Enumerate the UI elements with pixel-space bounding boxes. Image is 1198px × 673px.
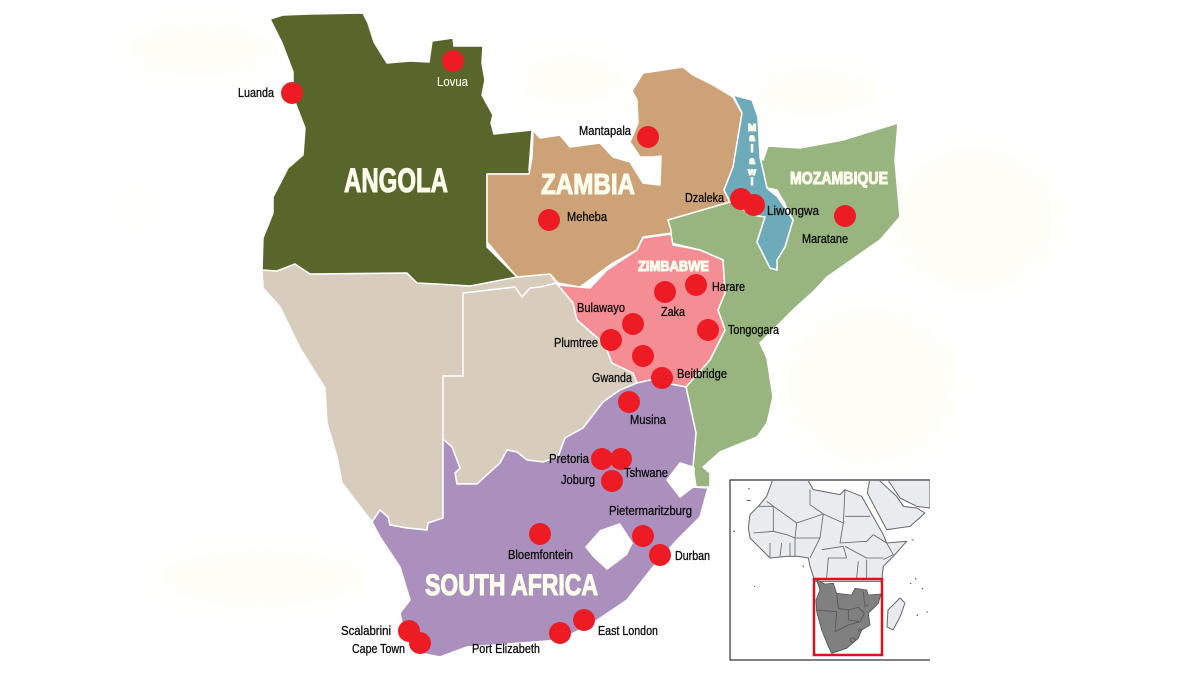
country names: SOUTH AFRICA [425, 569, 598, 602]
label: Malawi: w [747, 167, 756, 178]
inset highlight box [814, 579, 882, 655]
country: Malawi [724, 95, 793, 270]
label: Malawi [747, 123, 756, 188]
site labels [238, 74, 848, 656]
site markers [281, 50, 856, 654]
site labels: Tongogara [728, 322, 780, 337]
site labels: Port Elizabeth [472, 641, 540, 656]
label: Malawi: i [751, 177, 754, 188]
country: Namibia and Botswana [262, 264, 637, 530]
site labels: Bulawayo [577, 300, 625, 315]
country names: MOZAMBIQUE [790, 168, 888, 188]
country names: ANGOLA [344, 162, 448, 200]
label: Malawi: M [748, 123, 756, 134]
site labels: Joburg [561, 472, 595, 487]
site labels: Zaka [661, 304, 686, 319]
site labels: Gwanda [592, 370, 633, 385]
label: Malawi: l [751, 144, 754, 155]
site labels: Durban [675, 548, 710, 563]
site labels: Meheba [567, 209, 608, 224]
site labels: Pietermaritzburg [609, 503, 692, 518]
site labels: Beitbridge [677, 366, 727, 381]
enclave: Lesotho [585, 523, 633, 570]
site labels: Pretoria [549, 451, 590, 466]
site labels: East London [598, 623, 658, 638]
site labels: Maratane [802, 231, 848, 246]
country: Angola [262, 13, 532, 286]
site labels: Harare [712, 279, 745, 294]
country: South Africa [372, 380, 708, 657]
country names: ZIMBABWE [638, 259, 709, 275]
site labels: Luanda [238, 85, 275, 100]
site labels: Scalabrini [341, 623, 391, 638]
label: Malawi: a [749, 133, 755, 144]
site labels: Cape Town [352, 641, 405, 656]
label: Malawi: a [749, 156, 755, 167]
site labels: Tshwane [624, 465, 668, 480]
site labels: Plumtree [554, 335, 598, 350]
country: Mozambique [668, 123, 900, 487]
country: Zimbabwe [558, 234, 725, 387]
site labels: Dzaleka [685, 190, 725, 205]
country names [344, 162, 888, 602]
inset locator map of Africa [730, 478, 930, 660]
site labels: Bloemfontein [508, 547, 573, 562]
country names: ZAMBIA [541, 169, 635, 201]
site labels: Mantapala [579, 123, 632, 138]
site labels: Musina [630, 412, 667, 427]
site labels: Liwongwa [767, 203, 820, 218]
site labels: Lovua [437, 74, 469, 89]
map infographic [145, 14, 1041, 661]
country: Zambia [487, 67, 742, 287]
